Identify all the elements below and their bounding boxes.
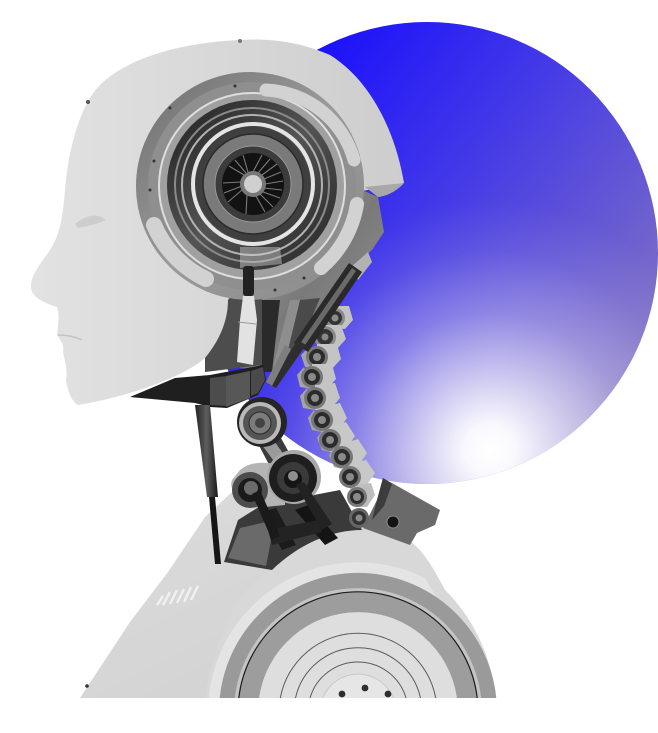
robot shoulder body [80, 492, 496, 698]
jaw bracket [205, 290, 262, 372]
neck mechanism base [224, 490, 362, 570]
gradient circle [196, 22, 658, 484]
eye socket [75, 216, 106, 228]
mouth line [58, 335, 82, 340]
piston rod [195, 405, 221, 564]
grey bracket [363, 478, 440, 545]
shoulder disc [209, 562, 496, 698]
hydraulic cylinder [266, 263, 362, 388]
shell lip [365, 183, 404, 197]
chrome lower reflection [240, 247, 282, 268]
black neck box [130, 365, 266, 408]
neck back bracket [240, 190, 384, 372]
ear turbine [136, 72, 364, 300]
vent marks [157, 586, 198, 605]
vertebrae chain [297, 306, 375, 528]
ring plates [154, 90, 357, 279]
lower neck joints [231, 450, 332, 540]
turbine blades [223, 155, 283, 214]
audio plug cable [237, 266, 257, 365]
turbine hub [244, 175, 262, 193]
upper neck joint [237, 397, 296, 478]
head shell and face [31, 39, 404, 405]
